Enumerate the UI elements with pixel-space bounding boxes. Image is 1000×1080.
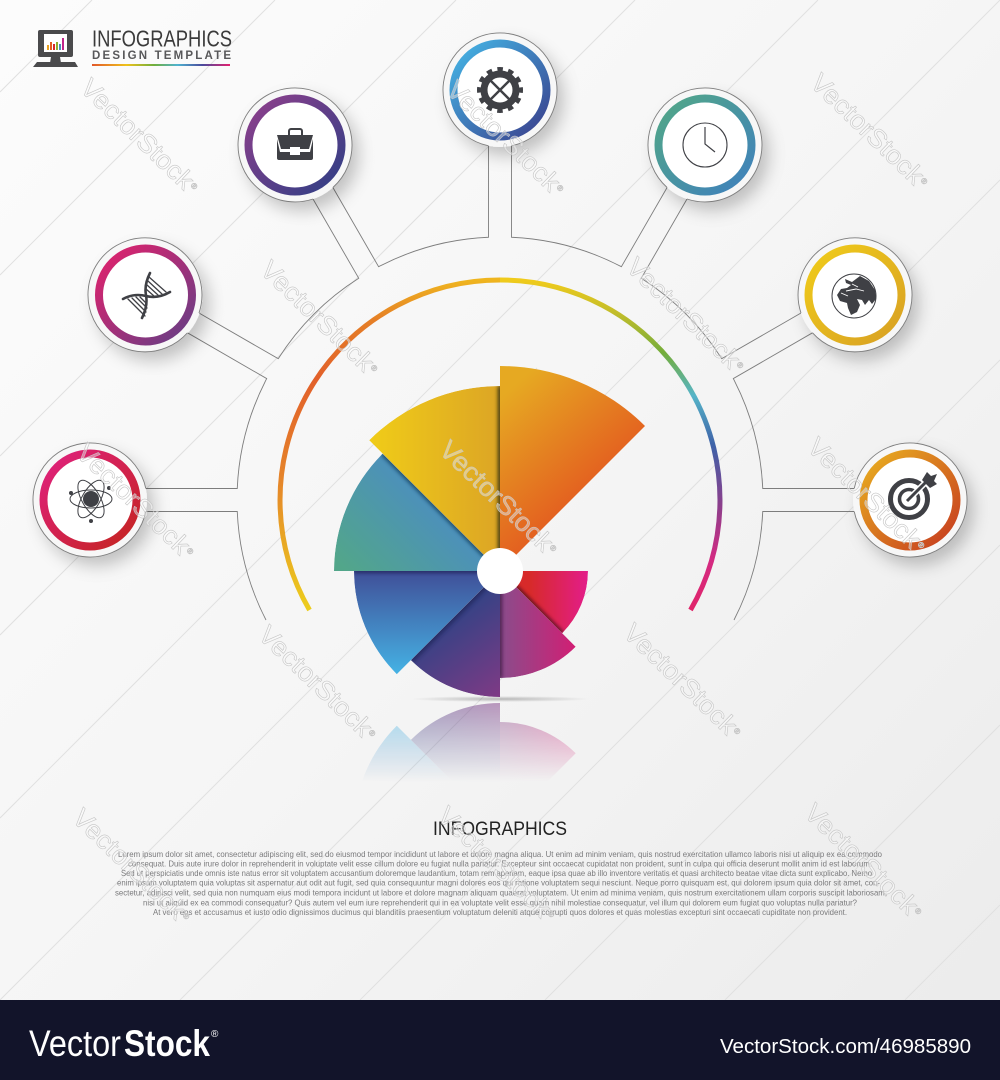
heading: infographics: INFOGRAPHICS — [433, 819, 567, 840]
lorem text block: sectetur, adipisci velit, sed quia non numquam eius modi tempora incidunt ut labore et dolore magnam aliquam quaerat voluptatem. Ut enim ad minima veniam, quis nostrum exercitationem ullam corporis suscipit laboriosam, — [115, 888, 887, 898]
watermarks: VectorStock — [802, 431, 928, 555]
rainbow arc — [280, 280, 720, 610]
watermarks: ® — [369, 363, 379, 374]
icon: atom — [69, 476, 112, 523]
watermarks: VectorStock — [71, 437, 197, 561]
subtitle: design template: DESIGN TEMPLATE — [92, 50, 231, 62]
sector: orange — [500, 366, 645, 571]
watermarks: VectorStock — [621, 251, 747, 375]
watermarks: VectorStock — [799, 797, 925, 921]
watermarks: VectorStock — [618, 617, 744, 741]
node: globe — [798, 238, 912, 352]
lorem text block: consequat. Duis aute irure dolor in reprehenderit in voluptate velit esse cillum dolore eu fugiat nulla pariatur. Excepteur sint occaecat cupidatat non proident, sunt in culpa qui officia deserunt mollit anim id est laborum. — [128, 858, 872, 868]
icon: briefcase — [277, 129, 313, 160]
watermarks: VectorStock — [432, 800, 558, 924]
lorem text block: enim ipsam voluptatem quia voluptas sit aspernatur aut odit aut fugit, sed quia consequuntur magni dolores eos qui ratione voluptatem sequi nesciunt. Neque porro quisquam est, qui dolorem ipsum quia dolor sit amet, con- — [117, 878, 880, 888]
watermarks — [67, 67, 935, 930]
lorem text block: Sed ut perspiciatis unde omnis iste natus error sit voluptatem accusantium doloremque laudantium, totam rem aperiam, eaque ipsa quae ab illo inventore veritatis et quasi architecto beatae vitae dicta sunt explicabo. Nemo — [121, 868, 872, 878]
watermarks: VectorStock — [253, 619, 379, 743]
watermarks: ® — [919, 176, 929, 187]
lorem text block: At vero eos et accusamus et iusto odio dignissimos ducimus qui blanditiis praesentium voluptatum deleniti atque corrupti quos dolores et quas molestias excepturi sint occaecati cupiditate non provident. — [153, 907, 847, 917]
node: clock — [648, 88, 762, 202]
icon: dna helix — [123, 273, 170, 318]
footer band — [0, 1000, 1000, 1080]
watermarks: ® — [913, 906, 923, 917]
watermarks: ® — [367, 728, 377, 739]
watermarks: VectorStock — [67, 802, 193, 926]
watermarks: VectorStock — [255, 254, 381, 378]
watermarks: ® — [916, 540, 926, 551]
icon: clock — [683, 123, 727, 167]
sector: magenta — [500, 587, 576, 678]
icon: monitor — [33, 30, 78, 67]
footer image id: VectorStock.com/46985890 — [720, 1036, 971, 1058]
node: gear — [443, 33, 557, 147]
icon: gear — [480, 70, 520, 110]
icon: globe — [832, 274, 876, 318]
watermarks: ® — [546, 909, 556, 920]
footer logo: Vector — [29, 1023, 121, 1064]
connector outline — [146, 146, 854, 620]
icon: target — [890, 472, 937, 518]
center hub — [477, 548, 523, 594]
header logo — [33, 26, 232, 67]
watermarks: VectorStock — [75, 72, 201, 196]
sector: purple — [411, 587, 500, 697]
node: dna — [88, 238, 202, 352]
lorem text block — [115, 849, 887, 917]
sector: blue — [354, 571, 484, 674]
node: briefcase — [238, 88, 352, 202]
floor shadow — [410, 696, 590, 702]
title: infographics: INFOGRAPHICS — [92, 26, 232, 52]
sector: red — [516, 571, 588, 634]
footer logo: ® — [211, 1029, 219, 1040]
sector: teal — [334, 454, 500, 571]
node: target — [853, 443, 967, 557]
reflection of pie — [365, 703, 576, 776]
watermarks: ® — [732, 726, 742, 737]
sector: yellow — [369, 386, 500, 571]
lorem text block: Lorem ipsum dolor sit amet, consectetur adipiscing elit, sed do eiusmod tempor incididunt ut labore et dolore magna aliqua. Ut enim ad minim veniam, quis nostrud exercitation ullamco laboris nisi ut aliquip ex ea commodo — [118, 849, 882, 859]
footer logo: Stock — [124, 1023, 210, 1064]
watermarks: VectorStock — [441, 74, 567, 198]
watermarks: VectorStock — [434, 434, 560, 558]
rainbow underline — [92, 64, 230, 66]
watermarks: ® — [555, 183, 565, 194]
watermarks: ® — [181, 911, 191, 922]
watermarks: ® — [189, 181, 199, 192]
watermarks: ® — [548, 543, 558, 554]
lorem text block: nisi ut aliquid ex ea commodi consequatur? Quis autem vel eum iure reprehenderit qui in ea voluptate velit esse quam nihil molestiae consequatur, vel illum qui dolorem eum fugiat quo voluptas nulla pariatur? — [143, 898, 857, 908]
pie chart — [334, 366, 645, 697]
watermarks: ® — [735, 360, 745, 371]
watermarks: VectorStock — [805, 67, 931, 191]
watermarks: ® — [185, 546, 195, 557]
node: atom — [33, 443, 147, 557]
